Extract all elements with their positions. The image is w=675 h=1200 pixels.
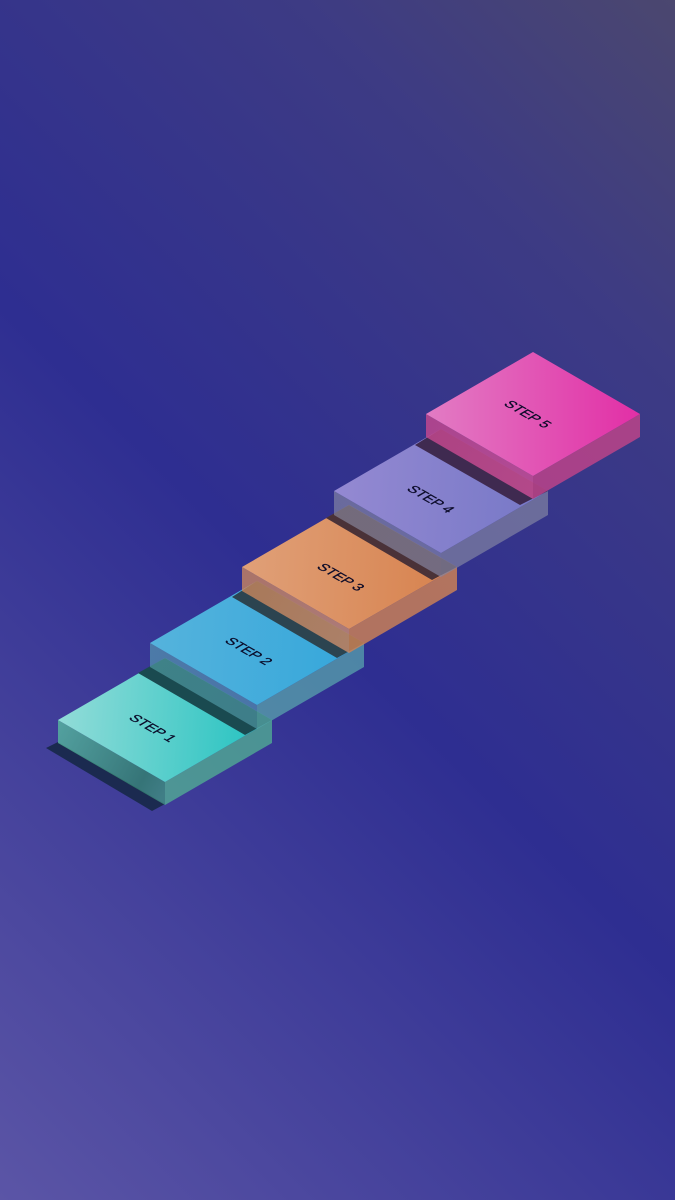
label: step 2: STEP 2	[221, 635, 277, 667]
shadow of step 2 on step 1	[138, 658, 272, 735]
shadow of step 3 on step 2	[232, 581, 364, 658]
label: step 3: STEP 3	[313, 561, 369, 593]
step 3	[242, 505, 457, 653]
step 1	[58, 658, 272, 805]
step 5	[426, 352, 640, 499]
label: step 4: STEP 4	[403, 483, 459, 515]
step 2	[150, 581, 364, 729]
ground shadow of step 1	[46, 742, 165, 811]
shadow of step 5 on step 4	[415, 429, 548, 505]
shadow of step 4 on step 3	[326, 505, 457, 580]
step 4	[334, 429, 548, 577]
label: step 1: STEP 1	[125, 712, 181, 744]
label: step 5: STEP 5	[500, 398, 556, 430]
